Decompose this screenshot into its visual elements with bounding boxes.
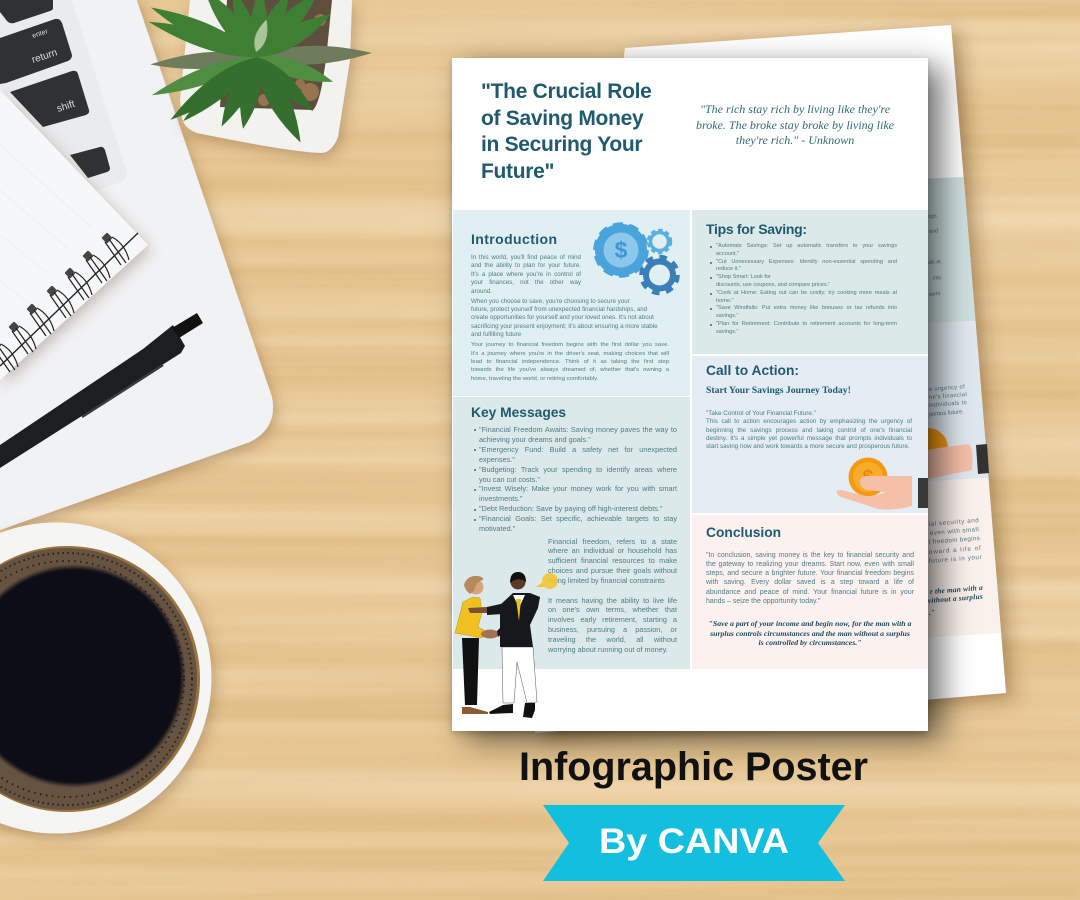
financial freedom text: choices and pursue their goals without [548, 566, 677, 575]
tips list: discounts, use coupons, and compare prices." [716, 282, 830, 288]
ribbon banner [543, 805, 845, 881]
back page of poster: even with small [930, 526, 979, 537]
back page of poster: oward a life of [929, 545, 981, 556]
conclusion heading: Conclusion [706, 525, 781, 540]
back page of poster: vithout a surplus [927, 592, 983, 605]
laptop: enter [31, 28, 49, 40]
introduction text: lead to financial independence. Think of it as taking the first step [471, 359, 669, 365]
top quote: "The rich stay rich by living like they're [700, 102, 890, 116]
introduction text: your finances, not the other way [471, 279, 581, 286]
top quote: broke. The broke stay broke by living like [696, 118, 894, 132]
back page of poster: e urgency of [929, 384, 965, 393]
icon: hand holding coin: $ [862, 467, 874, 489]
icon: hand holding coin [836, 458, 928, 510]
laptop: shift [56, 99, 77, 115]
call to action text: This call to action encourages action by emphasizing the urgency of [706, 418, 912, 425]
financial freedom text: It means having the ability to live life [548, 596, 677, 605]
key messages list: "Emergency Fund: Build a safety net for unexpected [479, 445, 677, 454]
key messages list: "Financial Goals: Set specific, achievable targets to stay [479, 514, 677, 523]
introduction text: It's a place where you're in control of [471, 271, 581, 278]
introduction text: It's a journey where you're in the driver's seat, making choices that will [471, 351, 669, 357]
tips list: "Cut Unnecessary Expenses: Identify non-essential spending and [716, 259, 897, 265]
closing quote: surplus controls circumstances and the man without a surplus [710, 629, 910, 638]
plant in white pot [146, 0, 372, 153]
closing quote: "Save a part of your income and begin now, for the man with a [709, 619, 911, 628]
key messages heading: Key Messages [471, 405, 566, 420]
illustration: two men shaking hands [454, 572, 558, 718]
back page of poster: future is in your [929, 554, 982, 565]
introduction text: future, protect yourself from unexpected financial hardships, and [471, 306, 647, 313]
conclusion text: hands – seize the opportunity today." [706, 598, 820, 605]
financial freedom text: on one's own terms, whether that [548, 605, 677, 614]
back page of poster: ." [928, 608, 935, 617]
tips list: home." [716, 298, 734, 304]
call to action text [706, 410, 912, 450]
closing quote: is controlled by circumstances." [758, 638, 862, 647]
introduction text: and the ability to plan for your future. [471, 262, 581, 269]
panel: introduction [453, 210, 690, 396]
back page of poster: ngs [928, 213, 937, 220]
poster title [481, 80, 652, 183]
back page of poster: perous future. [929, 409, 964, 418]
back page of poster: ial security and [929, 517, 980, 528]
call to action text: destiny. It's a simple yet powerful message that prompts individuals to [706, 435, 912, 442]
key messages list: motivated." [479, 524, 515, 533]
key messages list: expenses." [479, 455, 515, 464]
key messages list: "Financial Freedom Awaits: Saving money paves the way to [479, 425, 677, 434]
conclusion text: with saving. Every dollar saved is a step toward a life of [706, 579, 914, 586]
tips list: savings." [716, 313, 739, 319]
speech bubble [536, 573, 558, 589]
poster title: "The Crucial Role [481, 80, 652, 103]
man in black suit [468, 572, 540, 718]
key messages list: investments." [479, 494, 523, 503]
back page of poster: r the man with a [929, 583, 983, 596]
icon: gears with dollar sign: $ [615, 237, 628, 263]
financial freedom text: being limited by financial constraints [548, 576, 665, 585]
top quote [696, 102, 894, 147]
financial freedom text: sufficient financial resources to make [548, 556, 677, 565]
man in yellow shirt [455, 576, 488, 714]
financial freedom text: Financial freedom, refers to a state [548, 536, 677, 546]
back page of poster: , into [930, 275, 942, 282]
panel: conclusion [692, 515, 928, 669]
panel: key messages [453, 397, 690, 669]
key messages list [479, 425, 677, 533]
conclusion text: "In conclusion, saving money is the key to financial security and [706, 552, 914, 558]
introduction text: around. [471, 288, 492, 295]
tips list: "Plan for Retirement: Contribute to retirement accounts for long-term [716, 321, 897, 327]
panel: call to action [692, 356, 928, 513]
icon: gears with dollar sign [593, 222, 680, 296]
key messages list: "Budgeting: Track your spending to identify areas where [479, 465, 677, 474]
call to action text: "Take Control of Your Financial Future." [706, 410, 816, 417]
introduction text [471, 254, 669, 382]
tips list: "Shop Smart: Look for [716, 274, 771, 280]
key messages list: "Debt Reduction: Save by paying off high-interest debts." [479, 504, 663, 513]
bottom caption: Infographic Poster [519, 745, 868, 789]
laptop [0, 0, 273, 530]
financial freedom text: where an individual or household has [548, 546, 677, 555]
financial freedom text [548, 536, 677, 654]
introduction text: In this world, you'll find peace of mind [471, 254, 581, 261]
panel: tips for saving [692, 210, 928, 354]
introduction text: sacrificing your present enjoyment; it's about ensuring a more stable [471, 323, 658, 330]
pen [0, 313, 203, 468]
call to action text: beginning the savings process and taking control of one's financial [706, 427, 912, 434]
tips list: "Cook at Home: Eating out can be costly; try cooking more meals at [716, 290, 897, 296]
back page of poster: l freedom begins [929, 535, 980, 546]
key messages list: achieving your dreams and goals." [479, 435, 591, 444]
notebook [0, 90, 148, 380]
tips list: account." [716, 251, 739, 257]
tips list: reduce it." [716, 266, 741, 272]
back page of poster: and [929, 228, 938, 235]
introduction text: towards the life you've always dreamed of, whether that's owning a [471, 367, 669, 373]
introduction heading: Introduction [471, 231, 557, 247]
conclusion text: the gateway to realizing your dreams. Start now, even with small [706, 561, 914, 568]
ribbon banner: By CANVA [599, 822, 789, 861]
conclusion text [706, 552, 914, 605]
tips list: savings." [716, 329, 739, 335]
conclusion text: steps, and secure a brighter future. Your financial freedom begins [706, 570, 914, 577]
introduction text: and fulfilling future [471, 331, 521, 338]
introduction text: create opportunities for yourself and your loved ones. It's not about [471, 314, 654, 321]
closing quote [709, 619, 912, 647]
back page coin and hand [908, 428, 989, 479]
financial freedom text: worrying about running out of money. [548, 645, 668, 654]
front poster page [452, 58, 928, 731]
back page of poster: -term [928, 291, 941, 298]
introduction text: When you choose to save, you're choosing to secure your [471, 298, 630, 305]
poster title: Future" [481, 160, 554, 183]
laptop: return [31, 47, 59, 66]
key messages list: "Invest Wisely: Make your money work for you with smart [479, 484, 677, 493]
introduction text: Your journey to financial freedom begins with the first dollar you save. [471, 342, 669, 348]
call to action heading: Call to Action: [706, 363, 799, 378]
poster title: in Securing Your [481, 133, 642, 156]
financial freedom text: involves early retirement, starting a [548, 615, 677, 624]
conclusion text: abundance and peace of mind. Your financial future is in your [706, 589, 914, 596]
poster title: of Saving Money [481, 107, 643, 130]
call to action text: start saving now and work towards a more secure and prosperous future. [706, 443, 910, 450]
call to action subheading: Start Your Savings Journey Today! [706, 385, 851, 396]
back page of poster: als at [928, 259, 942, 266]
tips list: "Automate Savings: Set up automatic transfers to your savings [716, 243, 897, 249]
tips heading: Tips for Saving: [706, 221, 807, 237]
back page of poster: ne's financial [929, 392, 967, 401]
top quote: they're rich." - Unknown [736, 133, 854, 147]
tips list: "Save Windfalls: Put extra money like bonuses or tax refunds into [716, 305, 897, 311]
financial freedom text: business, pursuing a passion, or [548, 625, 677, 634]
financial freedom text: traveling the world, all without [548, 635, 677, 644]
key messages list: you can cut costs." [479, 475, 540, 484]
introduction text: home, traveling the world, or retiring comfortably. [471, 376, 598, 382]
back page of poster: individuals to [929, 400, 967, 409]
coffee cup [0, 522, 212, 834]
tips list [716, 243, 897, 335]
